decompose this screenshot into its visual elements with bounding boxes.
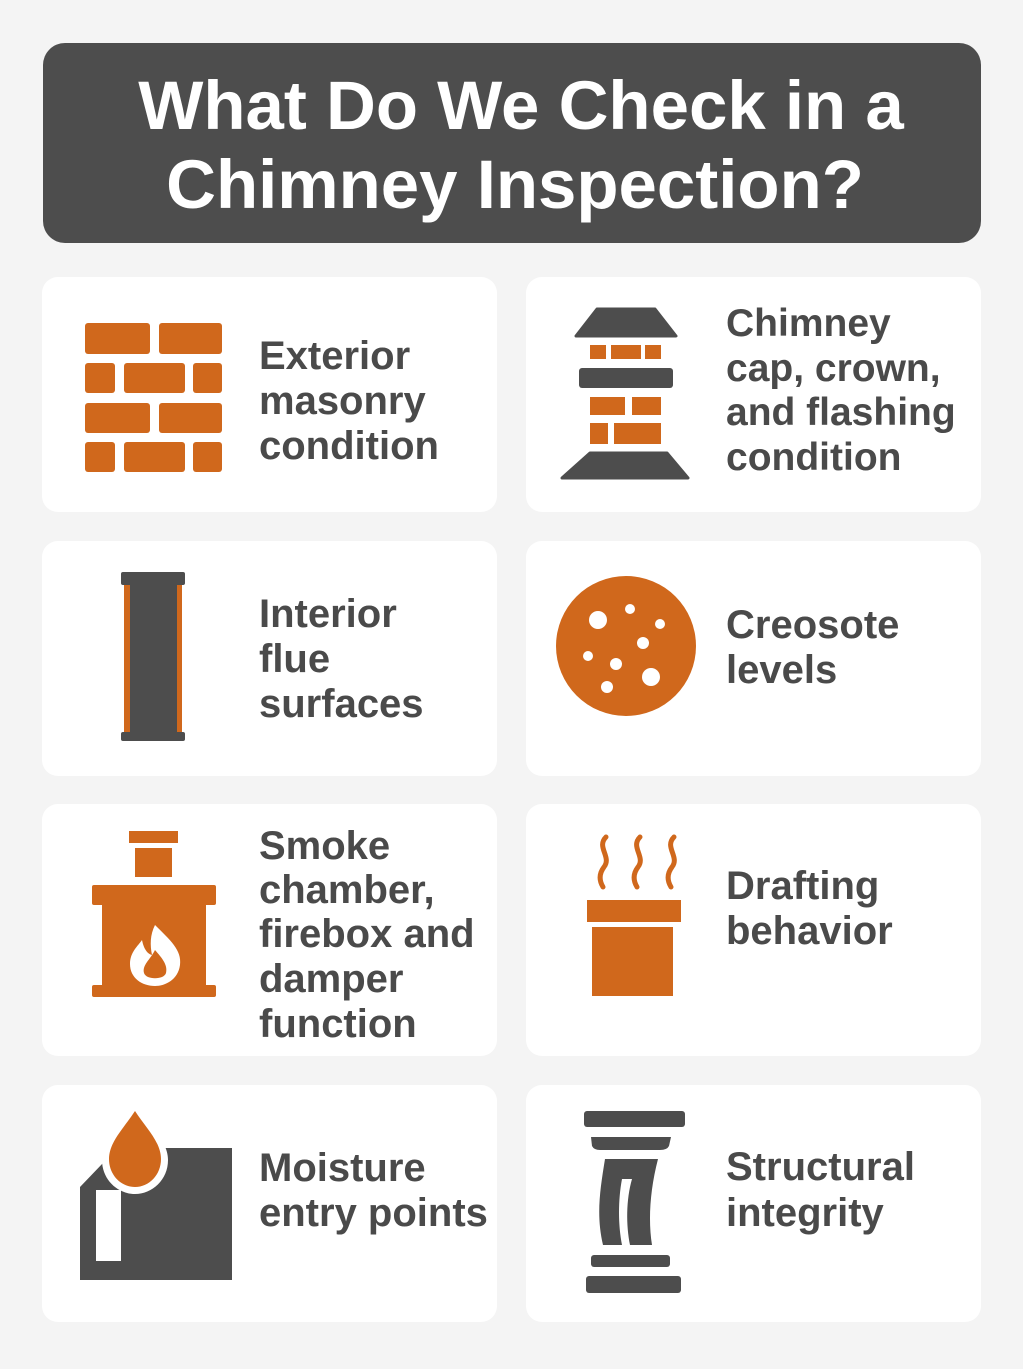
- text: structural integrity: [726, 1145, 915, 1235]
- icon: moisture drop: [80, 1104, 232, 1280]
- title banner: [43, 43, 981, 243]
- title banner: Chimney Inspection?: [166, 146, 864, 223]
- icon: creosote ball: [556, 576, 696, 716]
- icon: column: [584, 1111, 685, 1293]
- text: interior flue surfaces: flue: [259, 637, 330, 681]
- panel: chimney cap: [526, 277, 981, 512]
- text: smoke chamber firebox damper: chamber,: [259, 868, 435, 912]
- text: smoke chamber firebox damper: firebox and: [259, 912, 475, 956]
- panel: structural integrity: [526, 1085, 981, 1322]
- text: chimney cap crown flashing: and flashing: [726, 391, 956, 434]
- icon: fireplace: [92, 831, 216, 997]
- text: creosote levels: [726, 603, 899, 692]
- icon: chimney cap: [562, 309, 688, 478]
- panel: moisture: [42, 1085, 497, 1322]
- text: chimney cap crown flashing: [726, 302, 956, 479]
- text: exterior masonry condition: Exterior: [259, 334, 410, 378]
- text: structural integrity: integrity: [726, 1191, 885, 1235]
- text: smoke chamber firebox damper: [259, 824, 475, 1046]
- text: interior flue surfaces: surfaces: [259, 682, 424, 726]
- text: drafting behavior: [726, 864, 893, 953]
- text: drafting behavior: Drafting: [726, 864, 879, 908]
- text: chimney cap crown flashing: Chimney: [726, 302, 891, 345]
- panel: drafting: [526, 804, 981, 1056]
- text: smoke chamber firebox damper: damper: [259, 957, 404, 1001]
- panel: creosote: [526, 541, 981, 776]
- text: interior flue surfaces: Interior: [259, 592, 397, 636]
- text: interior flue surfaces: [259, 592, 424, 726]
- text: creosote levels: Creosote: [726, 603, 899, 647]
- text: structural integrity: Structural: [726, 1145, 915, 1189]
- panel: interior flue: [42, 541, 497, 776]
- text: creosote levels: levels: [726, 648, 837, 692]
- text: drafting behavior: behavior: [726, 909, 893, 953]
- text: chimney cap crown flashing: cap, crown,: [726, 347, 941, 390]
- panel: exterior masonry: [42, 277, 497, 512]
- icon: bricks: [85, 323, 222, 472]
- text: smoke chamber firebox damper: Smoke: [259, 824, 390, 868]
- text: chimney cap crown flashing: condition: [726, 436, 901, 479]
- title banner: What Do We Check in a: [138, 67, 904, 144]
- panel: smoke chamber: [42, 804, 497, 1056]
- text: exterior masonry condition: masonry: [259, 379, 426, 423]
- icon: flue: [121, 572, 185, 741]
- text: moisture entry points: Moisture: [259, 1146, 426, 1190]
- text: exterior masonry condition: condition: [259, 424, 439, 468]
- icon: drafting chimney: [587, 837, 681, 996]
- text: moisture entry points: [259, 1146, 488, 1235]
- text: moisture entry points: entry points: [259, 1191, 488, 1235]
- text: exterior masonry condition: [259, 334, 439, 468]
- text: smoke chamber firebox damper: function: [259, 1002, 417, 1046]
